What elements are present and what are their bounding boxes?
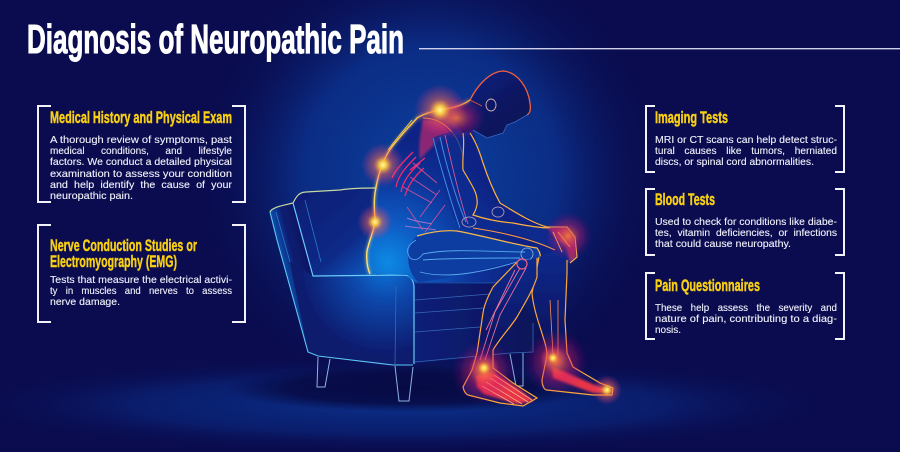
body text: nature of pain, contributing to a diag- <box>655 314 837 325</box>
near leg <box>463 258 537 406</box>
body text: medical conditions, and lifestyle <box>50 146 232 157</box>
torso and head <box>367 71 577 282</box>
heading: Pain Questionnaires <box>655 277 760 295</box>
title: Diagnosis of Neuropathic Pain <box>27 16 404 62</box>
body text: Used to check for conditions like diabe- <box>655 217 837 228</box>
panel: medical history <box>38 106 245 202</box>
body text: neuropathic pain. <box>50 191 133 202</box>
ribs <box>388 118 463 232</box>
heading: Blood Tests <box>655 191 715 209</box>
title rule <box>419 48 900 50</box>
body text <box>50 275 232 308</box>
panel: nerve conduction <box>38 225 245 322</box>
body text: Tests that measure the electrical activi- <box>50 275 232 286</box>
body text: These help assess the severity and <box>655 303 837 314</box>
heading: Nerve Conduction Studies or <box>50 237 197 255</box>
body text <box>655 135 837 168</box>
body text: and help identify the cause of your <box>50 180 233 191</box>
heading <box>50 237 197 271</box>
pain glow: lower back <box>357 204 393 240</box>
body text <box>50 135 233 202</box>
pain glow: near ankle <box>452 340 516 404</box>
panel: blood tests <box>646 189 844 255</box>
chair arm <box>290 262 414 365</box>
upper back pain area <box>419 120 452 160</box>
thigh and femur <box>408 231 541 282</box>
body text: MRI or CT scans can help detect struc- <box>655 135 837 146</box>
heading: Electromyography (EMG) <box>50 253 177 271</box>
frame <box>646 273 844 339</box>
heading: Medical History and Physical Exam <box>50 109 232 127</box>
near arm <box>432 131 577 263</box>
far arm <box>470 133 547 227</box>
far leg <box>532 250 613 395</box>
pain glow: neck <box>426 96 486 140</box>
heading: Imaging Tests <box>655 109 728 127</box>
illustration: man in armchair <box>270 71 622 406</box>
body text <box>655 217 837 250</box>
frame <box>646 189 844 255</box>
pain glow: mid back <box>361 143 405 187</box>
hair and face line <box>470 71 530 115</box>
frame <box>38 225 245 322</box>
body text: factors. We conduct a detailed physical <box>50 157 232 168</box>
frame <box>646 106 844 172</box>
body text: nerve damage. <box>50 297 120 308</box>
back outline <box>367 100 470 274</box>
ear <box>486 99 496 111</box>
pain glow: hand <box>544 212 592 260</box>
body text: nosis. <box>655 325 681 336</box>
armchair <box>270 188 533 401</box>
pain glow: far ankle <box>524 330 588 394</box>
chair back <box>293 188 376 280</box>
panel: imaging tests <box>646 106 844 172</box>
body text: tural causes like tumors, herniated <box>655 146 837 157</box>
body text: discs, or spinal cord abnormalities. <box>655 157 814 168</box>
body text: ty in muscles and nerves to assess <box>50 286 232 297</box>
panel: pain questionnaires <box>646 273 844 339</box>
body text: A thorough review of symptoms, past <box>50 135 232 146</box>
pain glow: shoulder <box>414 84 466 136</box>
body text <box>655 303 837 336</box>
chair legs <box>317 353 523 401</box>
hand <box>547 227 577 263</box>
chair wing <box>270 203 330 352</box>
body text: examination to assess your condition <box>50 169 232 180</box>
frame <box>38 106 245 202</box>
pain glow: toe <box>592 375 622 405</box>
body text: that could cause neuropathy. <box>655 239 791 250</box>
body text: tes, vitamin deficiencies, or infections <box>655 228 837 239</box>
